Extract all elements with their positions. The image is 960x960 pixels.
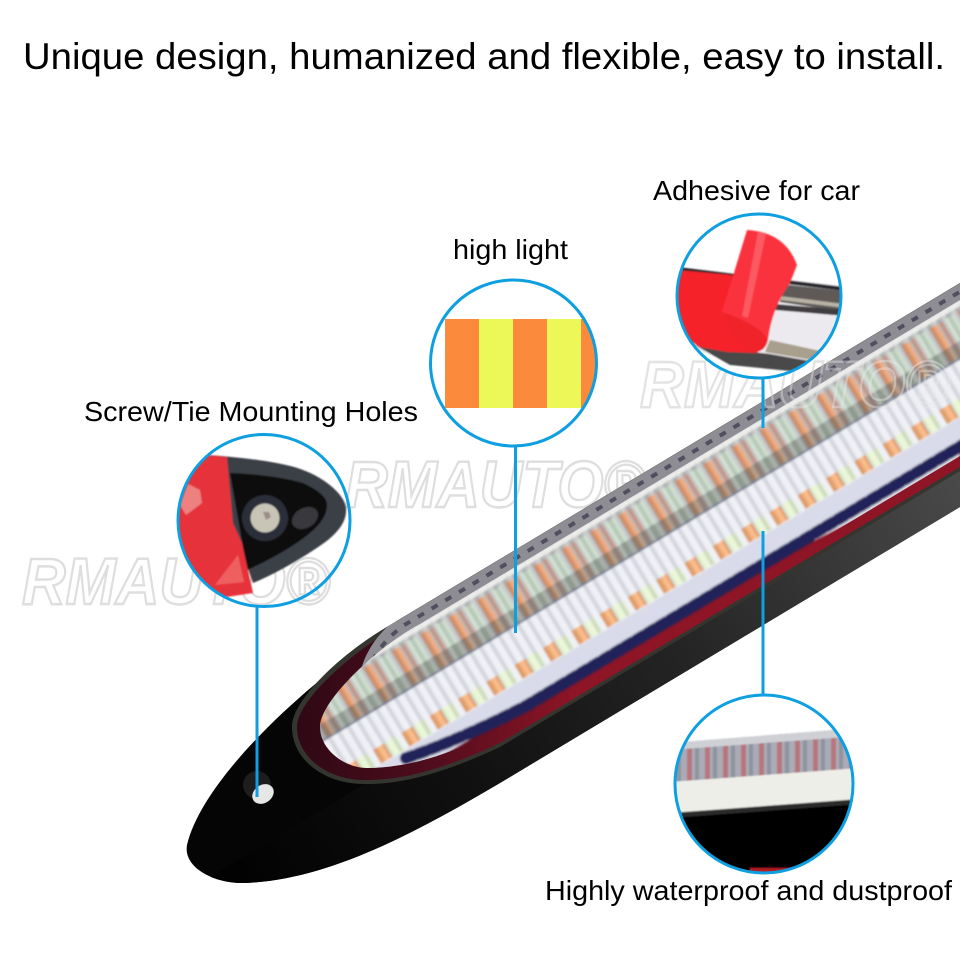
watermark left: RMAUTO®	[22, 544, 330, 618]
watermarks	[22, 347, 950, 618]
clear lens	[320, 300, 960, 768]
detail photo	[678, 229, 840, 376]
dark rim and maroon reflector	[292, 283, 960, 784]
LED strip product photo	[186, 283, 960, 883]
upper LED row	[320, 304, 960, 741]
callout: high light	[430, 234, 599, 446]
black housing	[186, 283, 960, 883]
mounting hole	[243, 771, 278, 808]
navy bumps	[398, 438, 960, 764]
lower LED row	[322, 356, 960, 768]
line to housing	[762, 531, 764, 697]
detail photo	[170, 450, 346, 600]
white wavy line	[364, 300, 960, 665]
callout: adhesive for car	[653, 175, 860, 380]
orange and yellow LED swatch	[445, 319, 595, 408]
detail photo	[670, 696, 860, 875]
circle outline	[178, 434, 350, 606]
circle outline	[675, 695, 853, 873]
label: Highly waterproof and dustproof	[545, 875, 952, 906]
callout: screw mounting holes	[84, 396, 418, 606]
line to LEDs	[514, 446, 517, 633]
label: Adhesive for car	[653, 175, 860, 206]
label: Screw/Tie Mounting Holes	[84, 396, 418, 427]
line to mounting hole	[256, 606, 258, 797]
callout: waterproof and dustproof	[545, 695, 952, 906]
watermark centre: RMAUTO®	[345, 447, 647, 521]
label: high light	[453, 234, 568, 265]
title: Unique design, humanized and flexible, easy to install.	[23, 36, 945, 77]
circle outline	[677, 214, 841, 378]
callout lines	[257, 377, 763, 797]
grey top edge band	[362, 283, 960, 667]
line to adhesive	[762, 377, 764, 428]
circle outline	[430, 280, 596, 446]
